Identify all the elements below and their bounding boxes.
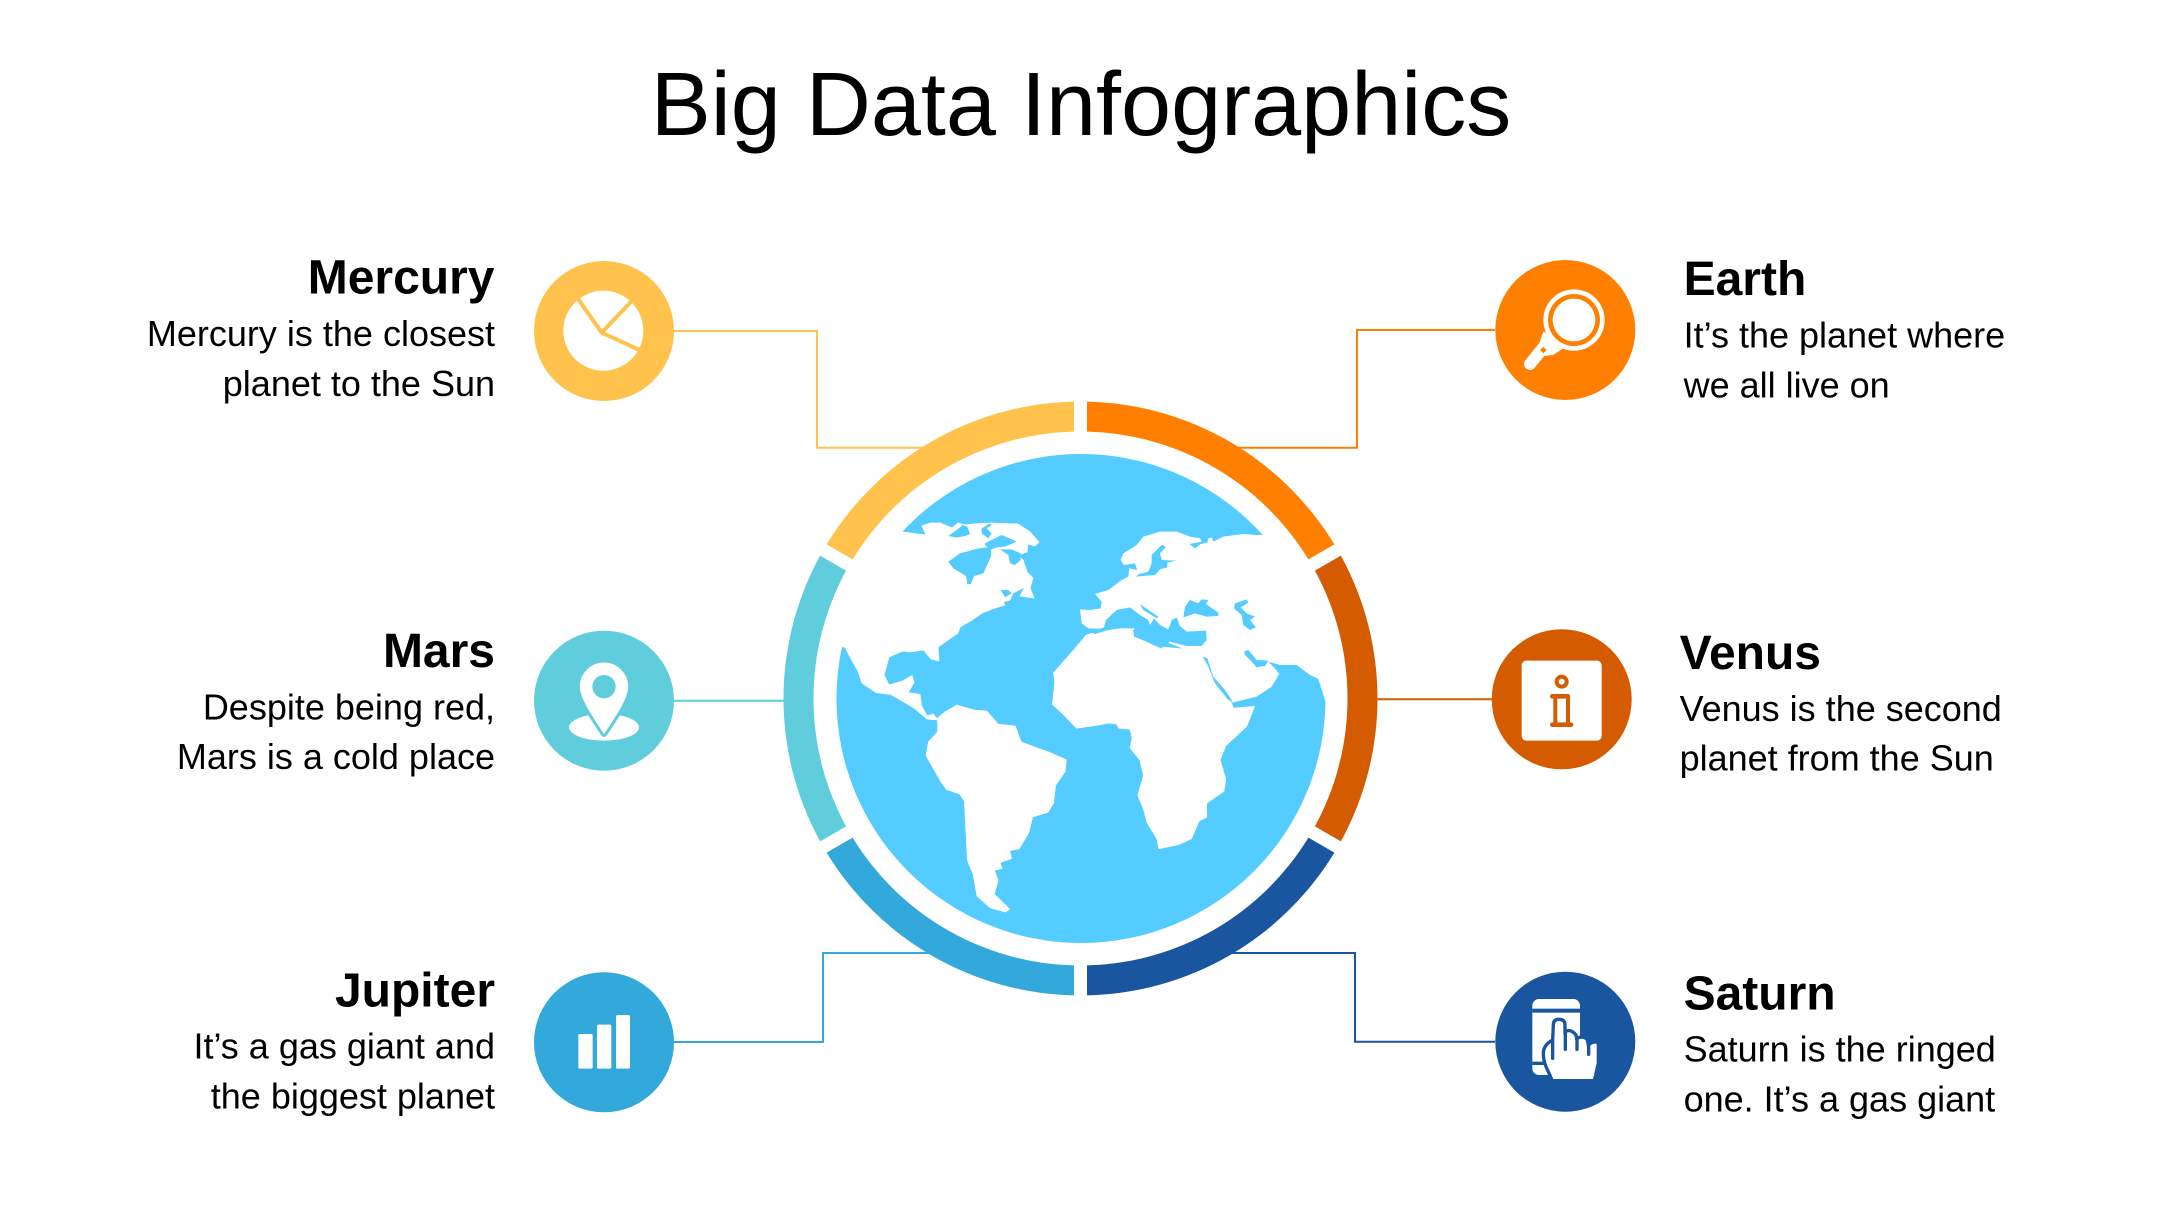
seas: Mediterranean, Black, Caspian, Red, Baltic, Persian Gulf <box>1080 545 1268 702</box>
connector: Venus <box>1350 698 1492 700</box>
text block: Venus: Venus <box>1680 627 1821 680</box>
text block: Mars: Mars <box>383 625 495 678</box>
text block: Mars: Despite being red, <box>203 686 495 728</box>
segmented ring <box>783 402 1378 995</box>
ring segment: Mercury <box>827 402 1074 559</box>
title: Big Data Infographics <box>651 55 1511 155</box>
text block: Saturn <box>1684 968 1996 1120</box>
ring segment: Earth <box>1087 402 1334 559</box>
land: Eurasia <box>1080 532 1333 703</box>
text block: Mars <box>177 625 495 777</box>
text block: Venus: Venus is the second <box>1680 688 2002 729</box>
ring segment: Jupiter <box>827 838 1074 995</box>
connector: Earth <box>1200 330 1495 448</box>
seas: Arctic and Hudson Bay <box>948 523 1021 597</box>
land: Africa <box>1052 627 1254 849</box>
text block: Mercury: Mercury <box>308 252 495 305</box>
text block: Jupiter: the biggest planet <box>211 1076 495 1117</box>
text block: Earth: Earth <box>1684 253 1806 306</box>
connector: Mars <box>674 700 790 702</box>
icon: Mercury pie chart <box>534 261 674 401</box>
text block: Jupiter: Jupiter <box>335 965 495 1018</box>
icon: Earth magnifier <box>1495 260 1635 400</box>
connector: Jupiter <box>674 953 960 1042</box>
text block: Saturn: Saturn is the ringed <box>1684 1029 1996 1070</box>
icon: Venus info sign <box>1492 629 1632 769</box>
land: South America <box>926 705 1066 912</box>
text block: Earth: we all live on <box>1683 365 1890 406</box>
connector: Saturn <box>1200 953 1495 1042</box>
text block: Earth <box>1683 253 2005 406</box>
text block: Mercury <box>147 252 495 404</box>
text block: Saturn: one. It’s a gas giant <box>1684 1079 1995 1120</box>
icon: Mars map pin <box>534 631 674 771</box>
text block: Saturn: Saturn <box>1684 968 1836 1021</box>
text block: Venus: planet from the Sun <box>1680 738 1994 779</box>
connector: Mercury <box>674 331 960 448</box>
ring segment: Saturn <box>1087 838 1334 995</box>
text block: Jupiter: It’s a gas giant and <box>193 1026 495 1067</box>
text block: Mercury: Mercury is the closest <box>147 313 495 354</box>
text block: Earth: It’s the planet where <box>1684 315 2005 356</box>
text block: Venus <box>1680 627 2002 779</box>
text block: Jupiter <box>193 965 495 1117</box>
icon: Saturn touch phone <box>1495 972 1635 1112</box>
globe <box>825 454 1333 943</box>
text block: Mercury: planet to the Sun <box>223 363 495 404</box>
land: North and Central America <box>825 520 1039 720</box>
icon: Jupiter bar chart <box>534 972 674 1112</box>
text block: Mars: Mars is a cold place <box>177 736 495 777</box>
ring segment: Venus <box>1315 556 1378 841</box>
ring segment: Mars <box>783 556 846 841</box>
